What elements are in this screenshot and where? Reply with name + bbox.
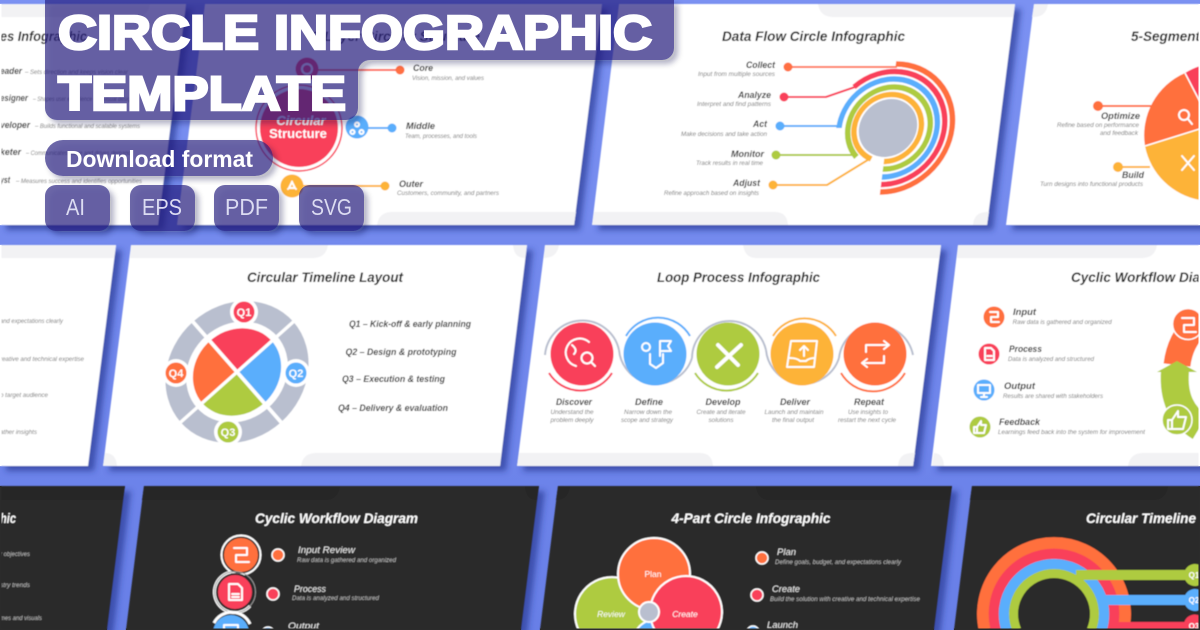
format button: PDF: PDF (225, 194, 268, 220)
step: act: Make decisions and take action (681, 132, 768, 138)
item descriptions (0, 319, 85, 436)
slide: partial left list (0, 245, 116, 466)
slide: partial dark list (0, 486, 125, 630)
step: process: Data is analyzed and structured (292, 596, 380, 602)
step: build (1040, 162, 1150, 188)
connector: Q1: Q1 (1189, 571, 1200, 580)
slide: multi-layer circular structure (177, 4, 602, 225)
step: develop: solutions (708, 418, 734, 424)
badge: Q4 (162, 359, 190, 387)
step: process: Process (1009, 344, 1042, 355)
step: input review: Raw data is gathered and organized (297, 558, 397, 564)
slide title: Loop Process Infographic (657, 269, 820, 285)
layer: middle: Team, processes, and tools (405, 134, 477, 140)
slide: 5-segment circle (1006, 4, 1200, 225)
step: deliver: Deliver (780, 397, 811, 408)
step: discover: problem deeply (549, 418, 595, 424)
connector: Q1 (1076, 564, 1200, 586)
slide: cyclic workflow diagram dark (126, 486, 539, 630)
download format pill (45, 140, 273, 176)
role list: keter (0, 147, 22, 158)
connector: Q2: Q2 (1189, 596, 1200, 605)
main title line two: TEMPLATE (58, 68, 346, 121)
step: output: Output (1004, 381, 1036, 392)
overlapping circles (575, 538, 722, 630)
step: repeat: Use insights to (848, 410, 889, 416)
role list: veloper (0, 120, 31, 131)
step: collect: Collect (746, 60, 776, 71)
step: adjust (664, 158, 871, 197)
central circle: Circular (276, 113, 327, 128)
badge: Q1 (230, 298, 258, 326)
central circle: Structure (269, 126, 327, 141)
quarter list: Q2 – Design & prototyping (346, 347, 457, 358)
item: create: Create (772, 584, 800, 595)
step: analyze (697, 87, 855, 108)
step: input review: Input Review (298, 545, 356, 556)
role list: yst (0, 175, 11, 186)
item descriptions: mes and visuals (0, 616, 42, 622)
step: feedback (970, 416, 1145, 438)
slide title: Circular Timeline Layout (247, 269, 404, 285)
role list: esigner (0, 93, 29, 104)
step: input review (222, 536, 397, 574)
slide title: Cyclic Workflow Diagram (255, 510, 418, 526)
step: define: Define (635, 397, 664, 408)
slide: data flow circle (592, 4, 1015, 225)
item: create (751, 584, 921, 603)
layer: middle: Middle (406, 121, 436, 132)
step: deliver: the final output (772, 418, 814, 424)
title panel (45, 0, 674, 121)
layer: outer: Customers, community, and partners (397, 191, 499, 197)
step: collect: Input from multiple sources (698, 72, 775, 78)
step: process (978, 344, 1095, 364)
role list: – Builds functional and scalable systems (34, 124, 140, 130)
quarter wheel (169, 312, 305, 432)
item: create: Build the solution with creative and technical expertise (770, 597, 921, 603)
segment labels (597, 569, 698, 619)
step: define: Narrow down the (624, 410, 673, 416)
step: monitor: Monitor (731, 149, 765, 160)
layer: outer: Outer (399, 179, 424, 190)
step: repeat: Repeat (854, 397, 885, 408)
step: discover: Discover (556, 397, 593, 408)
slide: circular timeline layout (103, 245, 527, 466)
step: analyze: Analyze (737, 90, 772, 101)
step: monitor: Track results in real time (696, 161, 764, 167)
step: feedback: Feedback (999, 417, 1041, 428)
step: input (984, 306, 1112, 328)
icon: upload tray (787, 341, 817, 367)
step: optimize: Refine based on performance (1057, 123, 1140, 129)
format button: PDF (214, 185, 279, 231)
step: act: Act (752, 119, 768, 130)
item: plan: Plan (777, 547, 796, 558)
badge: Q2: Q2 (289, 368, 303, 380)
layer: core (296, 58, 484, 82)
step: deliver (764, 318, 839, 424)
format button: SVG (299, 185, 364, 231)
step: deliver: Launch and maintain (764, 410, 824, 416)
icon: goal flag (642, 341, 671, 368)
role list: – Measures success and identifies opportunities (15, 179, 142, 185)
layer: core: Core (413, 63, 434, 74)
quarter list: Q4 – Delivery & evaluation (338, 403, 448, 414)
role list: – Shapes user experience and visual design (32, 97, 134, 103)
step: repeat (838, 322, 913, 424)
item descriptions: r objectives (0, 552, 30, 558)
slide title: hic (0, 510, 16, 526)
role list (0, 66, 142, 186)
slide title: 3-Layer Circular Structure (312, 28, 480, 44)
role list: eader (0, 66, 23, 77)
step: process: Process (294, 584, 326, 595)
step: develop: Develop (706, 397, 741, 408)
step: input: Raw data is gathered and organized (1013, 320, 1112, 326)
central circle (256, 85, 342, 171)
step: collect (698, 60, 897, 78)
step: monitor (696, 149, 856, 167)
step: define (619, 318, 692, 424)
step: adjust: Adjust (732, 178, 761, 189)
quarter list: Q1 – Kick-off & early planning (349, 319, 471, 330)
concentric arcs (831, 64, 960, 192)
segment labels: Review (597, 609, 626, 619)
download format pill: Download format (66, 146, 253, 172)
item descriptions (0, 552, 42, 622)
format button: SVG: SVG (311, 194, 352, 220)
role list: – Communicates value and drives demand (25, 151, 132, 157)
slide: roles infographic (0, 4, 186, 225)
step: optimize (1057, 101, 1153, 137)
item descriptions: stry trends (0, 583, 30, 589)
item descriptions: reative and technical expertise (0, 357, 85, 363)
step: output: Results are shared with stakeholders (1003, 394, 1103, 400)
slide title: es Infographic (0, 28, 87, 44)
step: build: Build (1122, 170, 1144, 181)
step: process: Data is analyzed and structured (1008, 357, 1095, 363)
connector: Q3 (1110, 614, 1200, 630)
item: plan (756, 547, 902, 566)
item: launch (747, 620, 798, 630)
step: input: Input (1013, 307, 1037, 318)
badge: Q1: Q1 (237, 307, 251, 319)
step: process (214, 572, 380, 613)
step: discover: Understand the (550, 410, 594, 416)
step: optimize: and feedback (1100, 131, 1139, 137)
slide: circular timeline dark (954, 486, 1200, 630)
item descriptions: o target audience (0, 393, 49, 399)
quarter list: Q3 – Execution & testing (342, 374, 445, 385)
step: analyze: Interpret and find patterns (697, 102, 771, 108)
format button: EPS: EPS (142, 194, 182, 220)
format button: EPS (130, 185, 195, 231)
segment labels: Plan (644, 569, 662, 579)
quarter list (338, 319, 471, 414)
step: discover (545, 321, 619, 424)
role list: – Sets direction and keeps vision clear (24, 70, 129, 76)
item descriptions: and expectations clearly (0, 319, 64, 325)
step: optimize: Optimize (1101, 111, 1141, 122)
step: develop (692, 321, 766, 424)
slide: 4-part circle infographic (540, 486, 952, 630)
pie chart (1144, 66, 1200, 200)
slide title: Data Flow Circle Infographic (722, 28, 905, 44)
badge: Q4: Q4 (169, 368, 184, 380)
format button: AI: AI (66, 194, 85, 220)
badge: Q3 (214, 418, 242, 446)
icon: repeat arrows (862, 341, 889, 367)
step: repeat: restart the next cycle (838, 418, 897, 424)
step: output (974, 380, 1103, 400)
icon: globe search (566, 339, 595, 366)
badge: Q2 (282, 359, 310, 387)
format button: AI (45, 185, 110, 231)
slide title: 4-Part Circle Infographic (671, 510, 831, 526)
connector: Q2 (1102, 589, 1200, 611)
step: feedback: Learnings feed back into the system for improvement (998, 430, 1145, 436)
slide: loop process infographic (517, 245, 941, 466)
segment labels: Create (672, 609, 698, 619)
step: build: Turn designs into functional products (1040, 182, 1143, 188)
layer: core: Vision, mission, and values (412, 76, 484, 82)
item descriptions: ather insights (0, 430, 37, 436)
layer: outer (280, 174, 499, 198)
icon: ruler and pencil (717, 345, 741, 367)
cycle arrows (1157, 308, 1200, 435)
step: develop: Create and iterate (696, 410, 746, 416)
concentric rings (983, 543, 1125, 630)
item: plan: Define goals, budget, and expectations clearly (775, 560, 902, 566)
slide title: Circular Timeline (1086, 510, 1196, 526)
badge: Q3: Q3 (221, 427, 235, 439)
slide: cyclic workflow diagram light (931, 245, 1200, 466)
step: output (213, 612, 319, 630)
main title: CIRCLE INFOGRAPHIC (58, 7, 652, 60)
step: adjust: Refine approach based on insights (664, 191, 759, 197)
layer: middle (346, 116, 477, 140)
step: define: scope and strategy (621, 418, 674, 424)
step: act (681, 119, 840, 138)
